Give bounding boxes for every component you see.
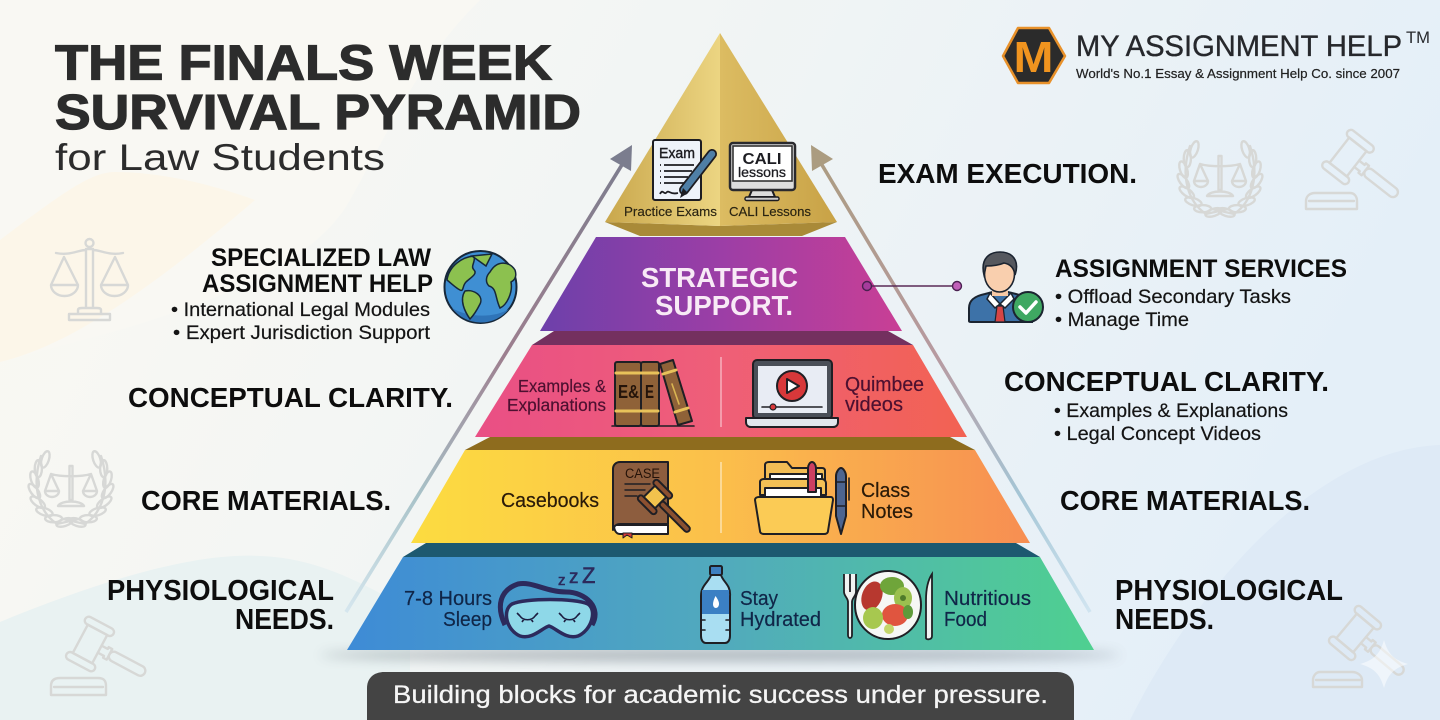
label: physiological needs left — [107, 575, 334, 636]
label: cali lessons: CALI Lessons — [729, 205, 811, 219]
text: z z z: z — [569, 567, 578, 588]
pyramid tier: core materials — [411, 437, 1030, 543]
text: z z z: Z — [582, 563, 595, 588]
icon: plate of food — [844, 571, 932, 639]
icon: cali monitor — [730, 143, 795, 200]
right callout: conceptual clarity: • Examples & Explanations — [1054, 400, 1288, 422]
tier text: strategic support — [641, 262, 798, 321]
icon: casebook and gavel — [613, 462, 699, 541]
pyramid tier: exam execution — [605, 33, 837, 236]
text: z z z: z — [558, 572, 566, 589]
right callout: conceptual clarity — [1004, 366, 1329, 445]
icon: exam paper: Exam — [659, 146, 695, 162]
title: for Law Students — [55, 137, 385, 178]
watermark: wreath right — [1175, 140, 1265, 218]
trademark: TM — [1406, 28, 1430, 47]
label: core materials right: CORE MATERIALS. — [1060, 485, 1310, 516]
right callout: assignment services: • Offload Secondary Tasks — [1055, 286, 1291, 308]
logo hexagon: M — [1014, 33, 1054, 82]
label: quimbee videos: videos — [845, 394, 903, 416]
sparkle — [1360, 640, 1408, 688]
connector: strategic support to assignment services — [862, 282, 962, 290]
right callout: assignment services: • Manage Time — [1055, 309, 1189, 331]
icon: cali monitor: CALI — [742, 151, 782, 168]
right callout: conceptual clarity: • Legal Concept Videos — [1054, 423, 1261, 445]
label: core materials left: CORE MATERIALS. — [141, 485, 391, 516]
left callout: specialized law assignment help: • International Legal Modules — [171, 299, 430, 321]
label: stay hydrated: Stay — [740, 588, 778, 610]
label: nutritious food — [944, 588, 1031, 631]
label: conceptual clarity left: CONCEPTUAL CLARITY. — [128, 382, 453, 413]
icon: globe — [444, 251, 516, 323]
label: exam execution: EXAM EXECUTION. — [878, 158, 1137, 189]
caption pill: Building blocks for academic success under pressure. — [393, 681, 1048, 709]
watermark: gavel top right — [1306, 128, 1412, 214]
arrow: left — [346, 145, 632, 612]
right callout: assignment services — [1055, 255, 1347, 331]
pyramid tier: strategic support — [540, 237, 902, 331]
tier text: strategic support: SUPPORT. — [655, 290, 793, 321]
label: physiological needs right: NEEDS. — [1115, 604, 1214, 636]
watermark: gavel bottom left — [51, 615, 156, 695]
icon: law books: E — [645, 382, 654, 402]
arrow: right — [811, 145, 1090, 612]
label: examples and explanations: Explanations — [507, 395, 606, 415]
caption pill — [367, 672, 1074, 720]
title: THE FINALS WEEK — [55, 36, 552, 90]
label: practice exams: Practice Exams — [624, 205, 717, 219]
title: SURVIVAL PYRAMID — [55, 86, 581, 140]
logo hexagon — [1003, 28, 1065, 83]
label: physiological needs left: NEEDS. — [235, 604, 334, 636]
label: casebooks: Casebooks — [501, 490, 599, 512]
icon: exam paper — [653, 140, 712, 200]
label: quimbee videos: Quimbee — [845, 374, 924, 396]
label: stay hydrated: Hydrated — [740, 609, 821, 631]
label: nutritious food: Nutritious — [944, 588, 1031, 610]
label: quimbee videos — [845, 374, 924, 416]
tier text: strategic support: STRATEGIC — [641, 262, 798, 293]
right callout: assignment services: ASSIGNMENT SERVICES — [1055, 255, 1347, 283]
label: examples and explanations — [507, 376, 606, 415]
icon: sleep mask — [500, 563, 595, 637]
left callout: specialized law assignment help: • Expert Jurisdiction Support — [173, 322, 431, 344]
logo — [1003, 28, 1430, 83]
icon: law books — [612, 360, 694, 426]
left callout: specialized law assignment help: ASSIGNMENT HELP — [202, 270, 433, 298]
pyramid shadow — [320, 649, 1120, 661]
text: z z z — [558, 563, 595, 589]
pyramid tier: conceptual clarity — [475, 331, 967, 437]
watermark: scales left — [51, 239, 128, 320]
label: class notes — [861, 480, 913, 523]
title — [55, 36, 581, 178]
watermark: wreath left — [26, 450, 116, 528]
icon: cali monitor: lessons — [738, 165, 786, 180]
icon: casebook and gavel: CASE — [625, 466, 660, 481]
label: sleep: 7-8 Hours — [404, 588, 492, 610]
logo name: MY ASSIGNMENT HELP — [1076, 30, 1402, 63]
right callout: conceptual clarity: CONCEPTUAL CLARITY. — [1004, 366, 1329, 397]
label: sleep: Sleep — [443, 609, 492, 631]
label: examples and explanations: Examples & — [518, 376, 606, 396]
icon: assignment expert — [969, 252, 1043, 322]
label: class notes: Notes — [861, 501, 913, 523]
label: physiological needs left: PHYSIOLOGICAL — [107, 575, 334, 607]
fork — [844, 574, 856, 638]
left callout: specialized law assignment help: SPECIALIZED LAW — [211, 244, 431, 272]
knife — [926, 574, 932, 639]
label: class notes: Class — [861, 480, 910, 502]
icon: laptop video — [746, 360, 838, 427]
pyramid tier: physiological needs — [347, 543, 1094, 650]
left callout: specialized law assignment help — [171, 244, 433, 344]
label: sleep — [404, 588, 492, 631]
label: stay hydrated — [740, 588, 821, 631]
icon: water bottle — [701, 566, 730, 643]
label: physiological needs right: PHYSIOLOGICAL — [1115, 575, 1343, 607]
logo tagline: World's No.1 Essay & Assignment Help Co. since 2007 — [1076, 66, 1400, 81]
icon: law books: E& — [618, 382, 639, 402]
label: physiological needs right — [1115, 575, 1343, 636]
label: nutritious food: Food — [944, 609, 987, 631]
icon: folder with notes — [755, 462, 849, 534]
watermark: gavel bottom right — [1313, 604, 1418, 691]
